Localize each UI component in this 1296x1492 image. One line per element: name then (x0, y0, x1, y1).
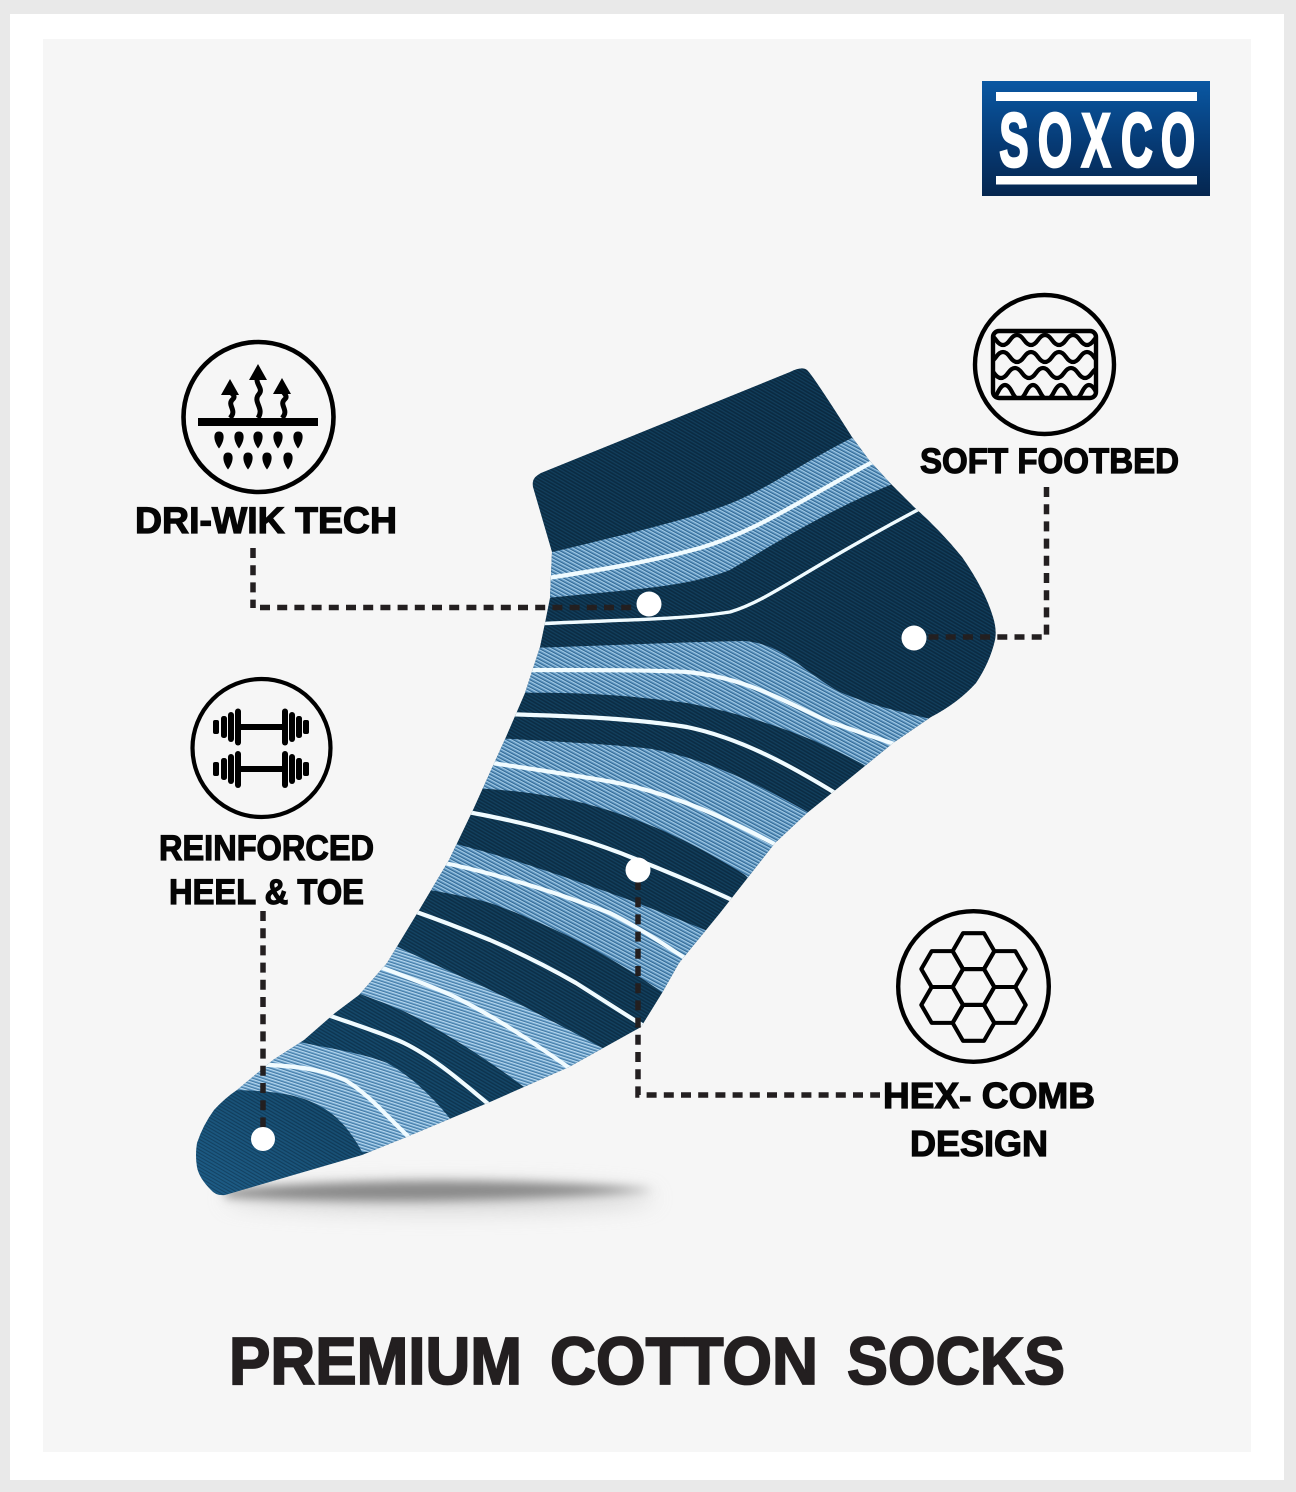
title: PREMIUM COTTON SOCKS: COTTON (550, 1324, 818, 1399)
stripe band: mid foot upper (482, 738, 808, 878)
connector: hex-comb design (638, 880, 880, 1095)
label: DRI-WIK TECH: DRI-WIK TECH (135, 499, 397, 541)
stripe band: arch (525, 641, 928, 766)
dumbbell: lower (213, 751, 309, 788)
title: PREMIUM COTTON SOCKS: PREMIUM (229, 1324, 522, 1399)
marker dots (251, 592, 926, 1151)
brand logo: SOXCO (982, 81, 1210, 196)
striped ankle sock (180, 350, 1020, 1210)
title: PREMIUM COTTON SOCKS (229, 1324, 1065, 1399)
dumbbell: upper (213, 708, 309, 746)
label: REINFORCED HEEL & TOE: HEEL & TOE (169, 873, 364, 912)
connector: reinforced heel and toe (260, 911, 266, 1130)
icon: hex comb (898, 911, 1049, 1062)
label: REINFORCED HEEL & TOE: REINFORCED (159, 829, 374, 868)
floor shadow under sock (225, 1181, 655, 1212)
connector: soft footbed (925, 487, 1046, 637)
icon: soft footbed (968, 295, 1114, 434)
connector: dri-wik tech (253, 548, 640, 608)
label: SOFT FOOTBED: SOFT FOOTBED (920, 442, 1179, 481)
white pinstripes (252, 458, 925, 1140)
label: HEX- COMB DESIGN: DESIGN (910, 1123, 1048, 1164)
stripe band: toe (236, 1042, 450, 1152)
stripe band: mid foot lower (431, 844, 706, 992)
stripe band: forefoot (360, 946, 603, 1087)
label: HEX- COMB DESIGN (883, 1075, 1095, 1164)
icon: moisture wicking (184, 342, 334, 492)
label: REINFORCED HEEL & TOE (159, 829, 374, 912)
title: PREMIUM COTTON SOCKS: SOCKS (847, 1324, 1065, 1399)
label: HEX- COMB DESIGN: HEX- COMB (883, 1075, 1095, 1116)
icon: dumbbells (192, 679, 330, 817)
stripe band: collar (550, 438, 892, 598)
brand logo: SOXCO: SOXCO (999, 99, 1195, 184)
